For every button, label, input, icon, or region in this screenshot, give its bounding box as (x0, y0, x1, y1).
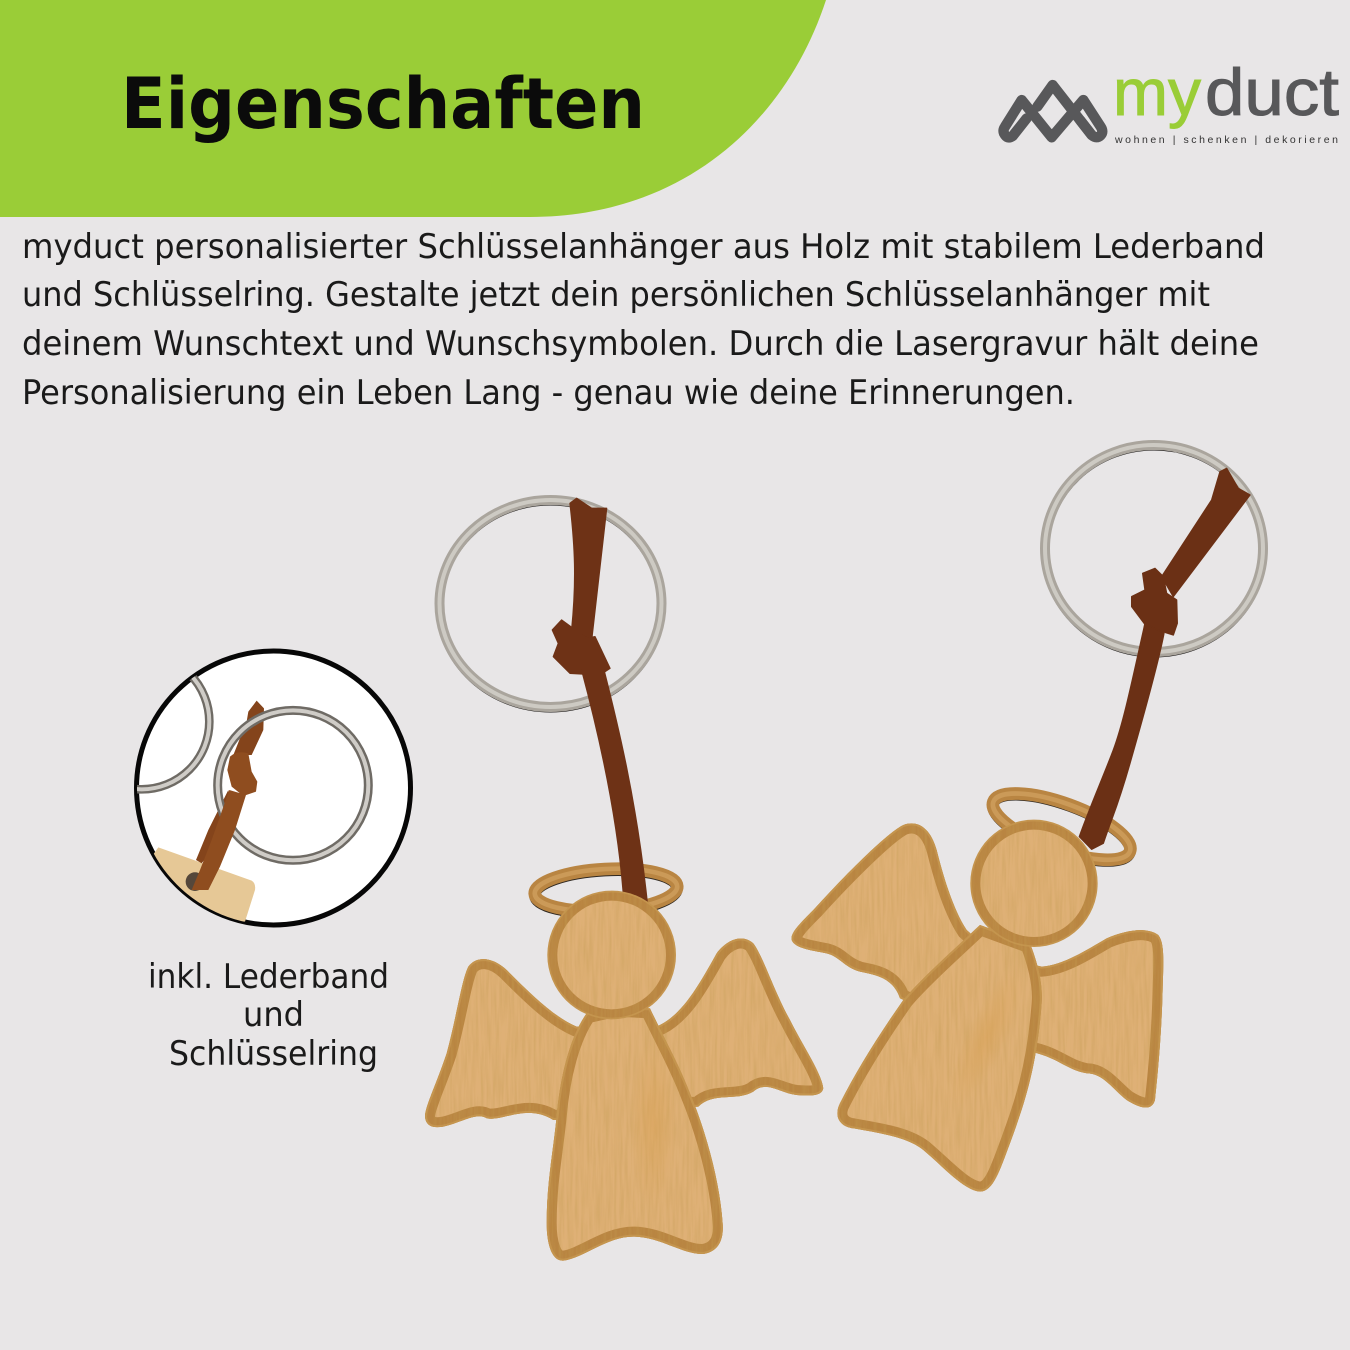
wood tag (152, 847, 255, 923)
inset circle: ring detail (134, 648, 413, 928)
description text (22, 227, 1265, 412)
head (970, 820, 1098, 947)
title: Eigenschaften (121, 63, 645, 145)
description text: und Schlüsselring. Gestalte jetzt dein persönlichen Schlüsselanhänger mit (22, 275, 1210, 314)
leather front (192, 752, 257, 890)
leather back (196, 701, 264, 863)
logo wordmark: my: my (1113, 55, 1201, 129)
inset caption (148, 957, 389, 1073)
keychain: left angel (425, 498, 823, 1261)
inset caption: Schlüsselring (169, 1034, 378, 1073)
wooden angel right (791, 820, 1163, 1192)
header: green shape (0, 0, 826, 217)
wing right (1036, 930, 1164, 1108)
description text: myduct personalisierter Schlüsselanhänger aus Holz mit stabilem Lederband (22, 227, 1265, 266)
wing left (425, 959, 578, 1128)
wing left (792, 823, 970, 1000)
inset caption: und (243, 995, 304, 1034)
body (837, 925, 1042, 1192)
head (547, 891, 676, 1019)
tag hole (186, 872, 199, 891)
logo tagline: wohnen | schenken | dekorieren (1114, 134, 1338, 146)
halo right (985, 780, 1138, 875)
stain (936, 959, 1037, 1115)
wing right (658, 938, 824, 1107)
logo icon: mountains (1004, 85, 1102, 137)
logo wordmark: duct: duct (1205, 55, 1339, 129)
wooden angel left (425, 891, 823, 1261)
stain (630, 1037, 677, 1210)
halo left (534, 865, 678, 916)
leather strap left (552, 498, 647, 903)
description text: deinem Wunschtext und Wunschsymbolen. Durch die Lasergravur hält deine (22, 324, 1259, 363)
logo (1004, 55, 1339, 146)
inset caption: inkl. Lederband (148, 957, 389, 996)
small ring (137, 675, 214, 794)
leather strap right (1079, 468, 1250, 849)
description text: Personalisierung ein Leben Lang - genau wie deine Erinnerungen. (22, 373, 1075, 412)
body (547, 1007, 723, 1261)
key ring left (440, 500, 662, 708)
keychain: right angel (791, 445, 1263, 1192)
key ring (218, 710, 368, 860)
key ring right (1045, 445, 1263, 654)
